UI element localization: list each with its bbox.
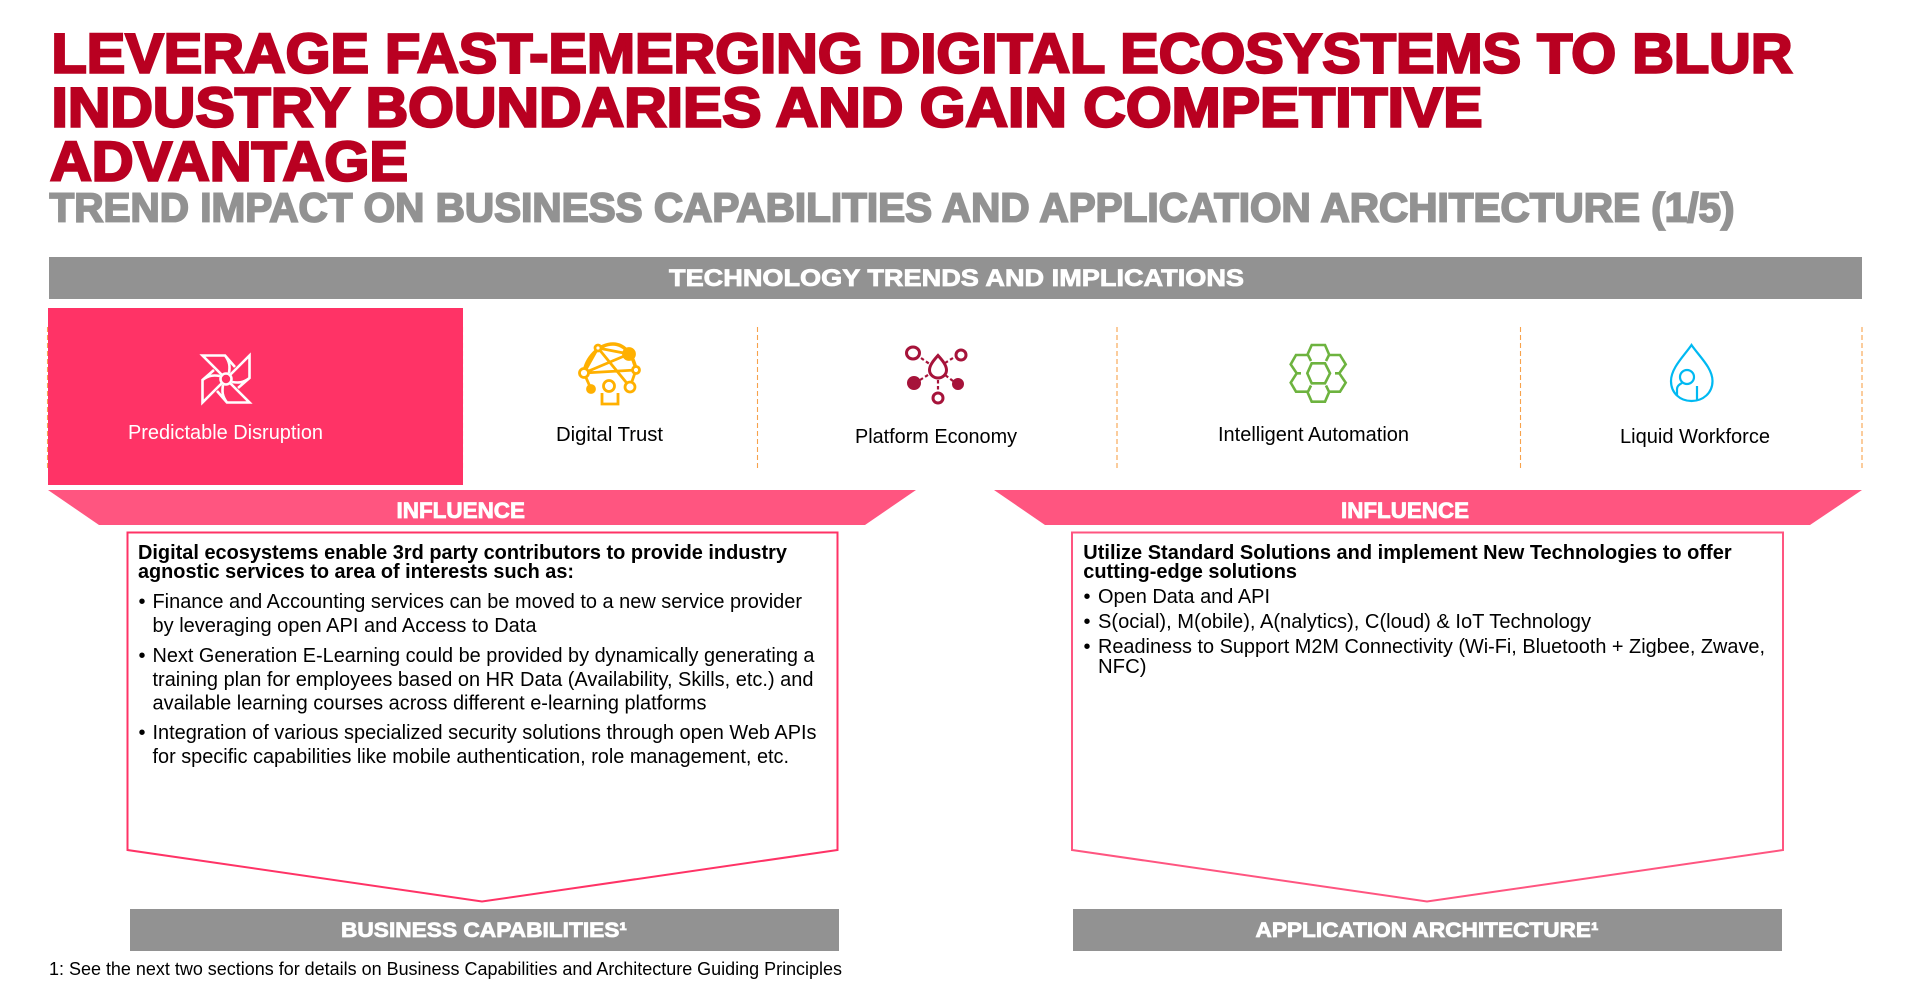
title: ADVANTAGE [50,130,408,192]
trend: digital trust: Digital Trust [556,424,663,446]
bullet list: business examples: • [138,722,146,744]
output bar: business capabilities: BUSINESS CAPABILITIES¹ [341,919,627,942]
trend: intelligent automation: Intelligent Automation [1218,424,1409,446]
panel: application influence [1072,532,1783,902]
panel heading: digital ecosystems: agnostic services to area of interests such as: [138,561,574,583]
title [50,22,1792,192]
bullet list: business examples: • [138,591,146,613]
trend: predictable disruption: Predictable Disruption [128,422,323,444]
footnote: 1: See the next two sections for details on Business Capabilities and Architecture Guiding Principles [49,959,842,979]
panel heading: standard solutions [1083,542,1732,583]
bullet list: application examples: S(ocial), M(obile), A(nalytics), C(loud) & IoT Technology [1098,611,1591,633]
bullet list: application examples: • [1084,636,1091,658]
trend: platform economy [855,347,1017,448]
header bar: technology trends and implications [49,257,1862,299]
trend: intelligent automation [1218,345,1409,446]
bullet list: business examples [138,591,816,768]
bullet list: business examples: by leveraging open API and Access to Data [152,615,537,637]
influence banner: left: INFLUENCE [396,498,525,523]
bullet list: business examples: Integration of various specialized security solutions through open Web APIs [152,722,816,744]
trend: platform economy: Platform Economy [855,426,1017,448]
bullet list: application examples: Readiness to Support M2M Connectivity (Wi-Fi, Bluetooth + Zigbee, Zwave, [1098,636,1765,658]
output bar: business capabilities [130,909,839,951]
bullet list: business examples: Next Generation E-Learning could be provided by dynamically generating a [152,645,815,667]
subtitle: TREND IMPACT ON BUSINESS CAPABILITIES AND APPLICATION ARCHITECTURE (1/5) [50,184,1734,230]
trend: predictable disruption [48,308,463,485]
trend: digital trust [556,344,663,446]
influence banner: right: INFLUENCE [1341,498,1469,523]
trend: liquid workforce: Liquid Workforce [1620,426,1770,448]
title: INDUSTRY BOUNDARIES AND GAIN COMPETITIVE [52,76,1482,138]
bullet list: business examples: training plan for employees based on HR Data (Availability, Skills, etc.) and [152,669,814,691]
title: LEVERAGE FAST-EMERGING DIGITAL ECOSYSTEMS TO BLUR [52,22,1792,84]
panel heading: standard solutions: Utilize Standard Solutions and implement New Technologies to offer [1083,542,1732,564]
influence banner: left [48,490,916,525]
trend: liquid workforce [1620,345,1770,448]
bullet list: application examples: NFC) [1098,656,1146,678]
panel heading: digital ecosystems [138,542,788,583]
bullet list: business examples: • [138,645,146,667]
bullet list: business examples: for specific capabilities like mobile authentication, role management, etc. [152,746,789,768]
icon: droplet network [906,347,966,403]
panel outline: right chevron box [1072,532,1783,902]
panel heading: digital ecosystems: Digital ecosystems enable 3rd party contributors to provide industry [138,542,788,564]
panel outline: left chevron box [128,532,838,902]
output bar: application architecture [1073,909,1782,951]
icon: water drop with person [1671,345,1712,401]
bullet list: application examples [1084,586,1765,678]
icon: honeycomb [1291,345,1346,402]
bullet list: business examples: Finance and Accounting services can be moved to a new service provider [152,591,802,613]
bullet list: application examples: Open Data and API [1098,586,1270,608]
bullet list: business examples: available learning courses across different e-learning platforms [152,692,706,714]
bullet list: application examples: • [1084,586,1091,608]
output bar: application architecture: APPLICATION ARCHITECTURE¹ [1256,919,1598,942]
icon: globe network with person [580,344,640,404]
icon: pinwheel [202,356,250,402]
bullet list: application examples: • [1084,611,1091,633]
header bar: technology trends and implications: TECHNOLOGY TRENDS AND IMPLICATIONS [669,265,1244,292]
panel: business influence [128,532,838,902]
influence banner: right [994,490,1862,525]
panel heading: standard solutions: cutting-edge solutions [1083,561,1297,583]
